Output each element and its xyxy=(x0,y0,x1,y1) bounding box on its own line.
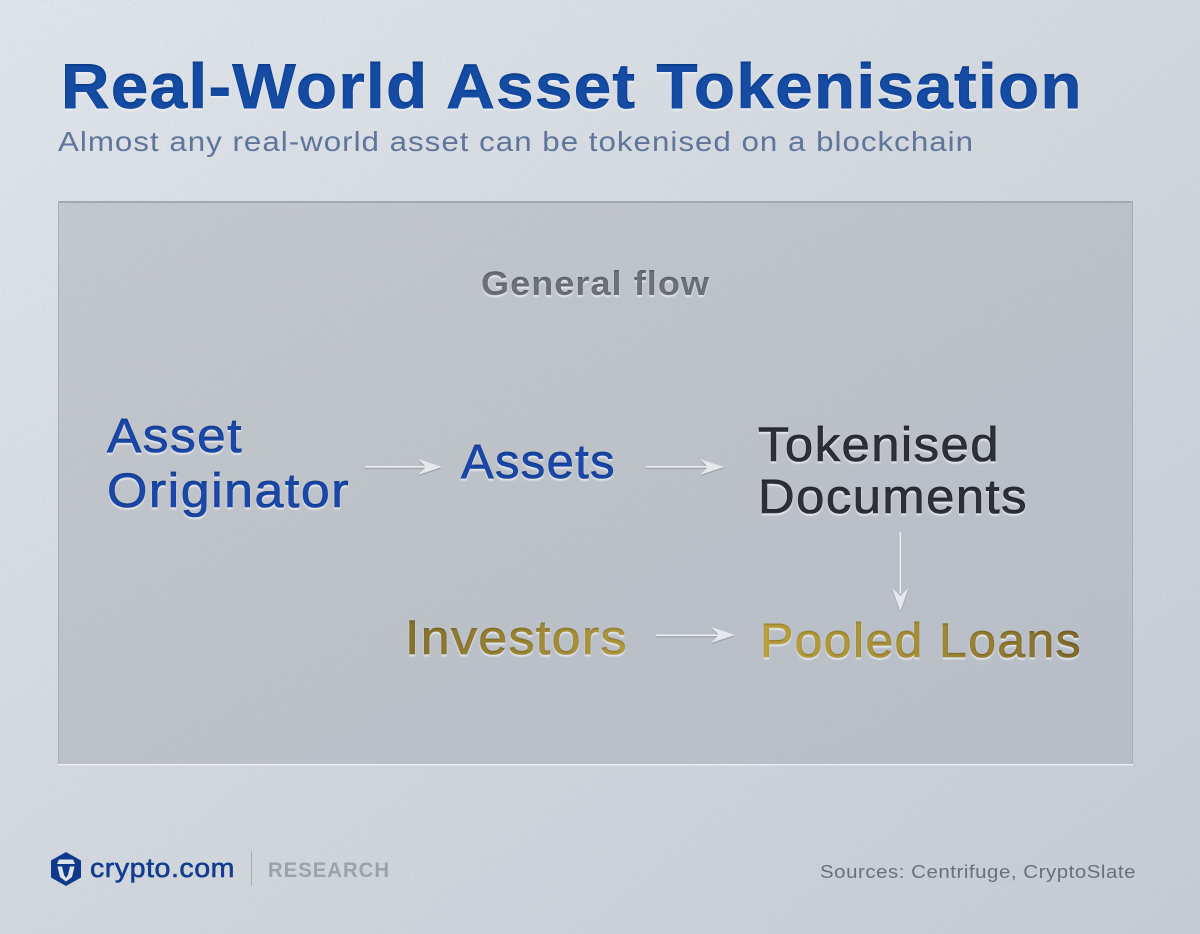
sources: Sources: Centrifuge, CryptoSlate xyxy=(820,861,1136,882)
arrow: tokenised documents to pooled loans xyxy=(892,532,908,611)
node: asset originator: Originator xyxy=(107,465,350,518)
panel: general flow xyxy=(58,201,1133,766)
logo wordmark: crypto.com xyxy=(90,853,235,883)
node: tokenised documents xyxy=(758,419,1028,524)
icon: crypto.com hexagon xyxy=(51,852,81,886)
research label: RESEARCH xyxy=(268,859,390,882)
logo: crypto.com research xyxy=(51,851,390,886)
arrow: investors to pooled loans xyxy=(656,627,735,643)
arrow: originator to assets xyxy=(365,459,442,475)
panel heading: General flow xyxy=(481,265,710,303)
node: pooled loans: Pooled Loans xyxy=(760,615,1082,668)
node: assets: Assets xyxy=(461,436,616,489)
node: asset originator xyxy=(107,410,350,518)
subtitle: Almost any real-world asset can be tokenised on a blockchain xyxy=(58,126,974,157)
node: asset originator: Asset xyxy=(107,410,243,463)
node: tokenised documents: Tokenised xyxy=(758,419,1000,472)
title: Real-World Asset Tokenisation xyxy=(61,52,1083,122)
node: investors: Investors xyxy=(405,612,628,665)
node: tokenised documents: Documents xyxy=(758,471,1028,524)
arrow: assets to tokenised documents xyxy=(646,459,724,475)
